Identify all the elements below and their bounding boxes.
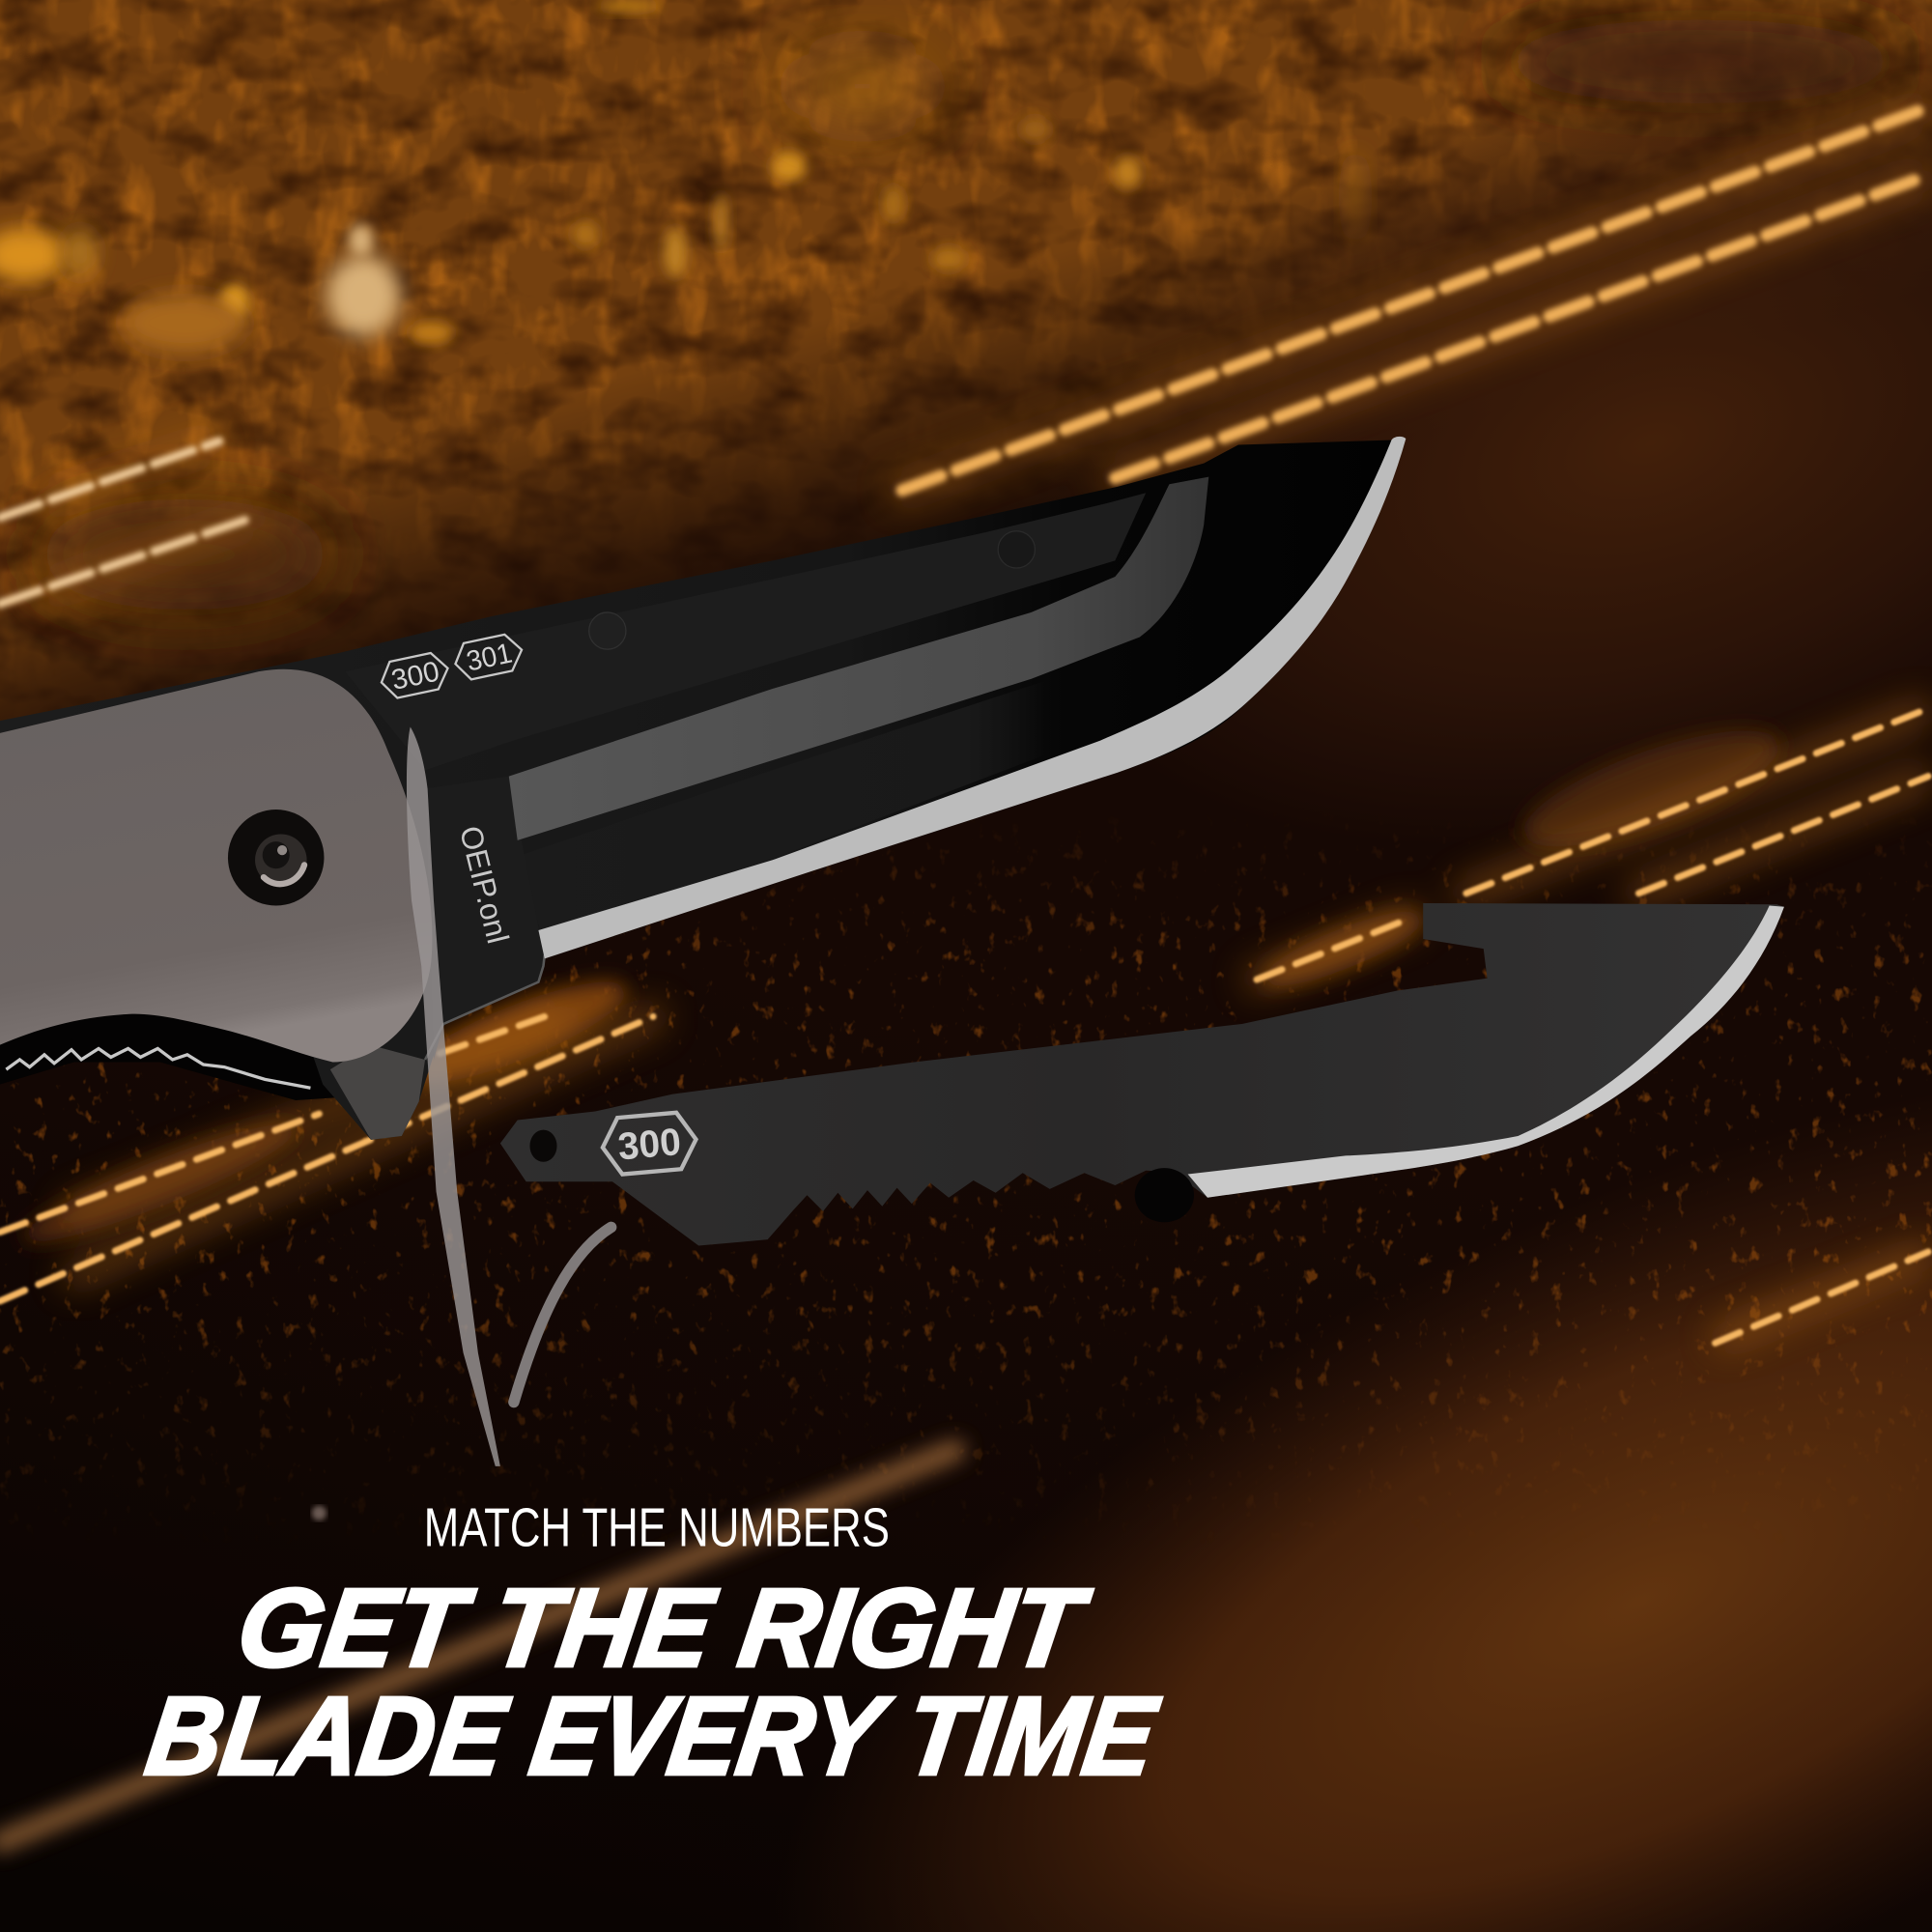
replacement blade xyxy=(500,903,1784,1246)
badge: 300 on folding blade: 300 xyxy=(388,655,442,696)
badge: 301 on folding blade: 301 xyxy=(464,637,515,678)
badge: 300 on folding blade xyxy=(378,650,452,700)
knife: sharpened edge xyxy=(538,437,1406,958)
badge: 300 on replacement blade: 300 xyxy=(616,1121,683,1168)
caption: match the numbers: MATCH THE NUMBERS xyxy=(424,1497,890,1558)
headline line 1: GET THE RIGHT xyxy=(231,1567,1096,1690)
blade: serration notch xyxy=(1135,1168,1194,1222)
headline xyxy=(139,1567,1165,1799)
blade: mounting hole xyxy=(529,1130,557,1162)
blade body with gut hook and serrations xyxy=(500,903,1784,1246)
leader line: from folding blade badge to caption xyxy=(407,727,500,1466)
badge: 301 on folding blade xyxy=(451,632,526,682)
stitching: leather seams xyxy=(0,107,1928,1343)
badge: 300 on replacement blade xyxy=(600,1111,698,1176)
knife: black gap and serrations under handle xyxy=(0,1005,352,1100)
stitching: blurred foreground seam xyxy=(0,1450,955,1842)
knife: pivot screw xyxy=(228,810,324,906)
knife: blade xyxy=(0,439,1406,1140)
engraved web address: OEIP.onl xyxy=(453,822,516,947)
knife: handle xyxy=(0,669,432,1062)
leader line: from replacement blade to caption xyxy=(514,1227,611,1403)
blade: sharpened edge xyxy=(1188,906,1784,1198)
folding knife xyxy=(0,437,1406,1140)
knife: fuller xyxy=(509,477,1208,840)
headline line 2: BLADE EVERY TIME xyxy=(139,1675,1165,1799)
